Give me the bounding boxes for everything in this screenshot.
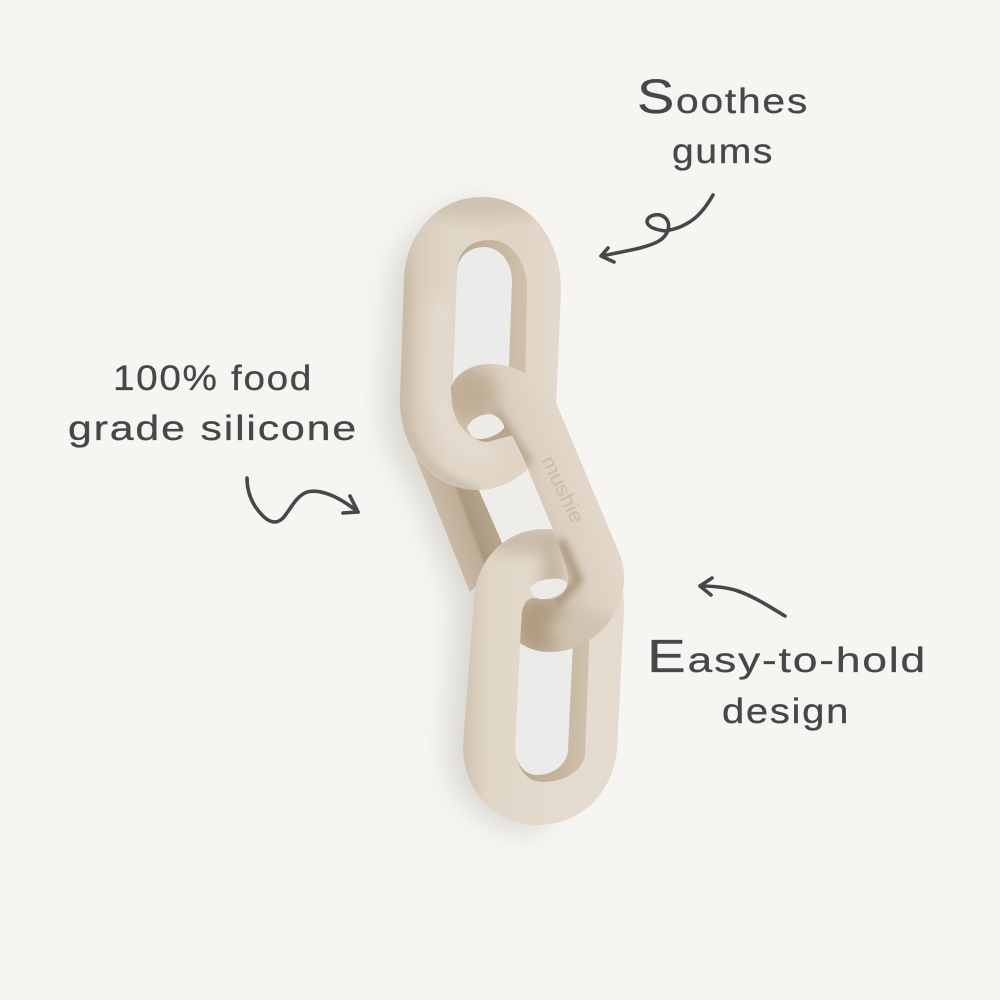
callout: soothes gums xyxy=(601,71,809,262)
teether product: three linked silicone chain links xyxy=(384,187,624,832)
heading: 100% food: 100% food xyxy=(113,359,313,398)
arrow: wavy arrow to link xyxy=(247,478,358,522)
small opening: lower joint xyxy=(530,579,567,599)
heading: Soothes: Soothes xyxy=(637,71,809,124)
shadow behind lower joint xyxy=(451,385,512,442)
middle link: rear bar xyxy=(415,455,503,592)
heading: Easy-to-hold: Easy-to-hold xyxy=(647,630,927,682)
bottom link xyxy=(463,526,624,825)
opening xyxy=(452,247,512,395)
arrow: curved arrow to lower link xyxy=(700,578,785,616)
embossed brand name: mushie xyxy=(537,453,588,527)
heading: gums: gums xyxy=(672,132,774,171)
callout: 100% food grade silicone xyxy=(68,359,358,522)
callout: easy-to-hold design xyxy=(647,578,927,731)
inner wall of opening xyxy=(452,240,527,390)
soft drop shadow xyxy=(384,205,560,832)
middle link: front bar xyxy=(444,364,624,655)
heading: grade silicone: grade silicone xyxy=(68,409,358,448)
top link xyxy=(400,187,561,492)
small opening: top joint xyxy=(467,414,504,439)
arrow: curly arrow to top link xyxy=(601,195,713,262)
see-through gap between the bars xyxy=(470,450,556,548)
heading: design: design xyxy=(722,692,850,731)
